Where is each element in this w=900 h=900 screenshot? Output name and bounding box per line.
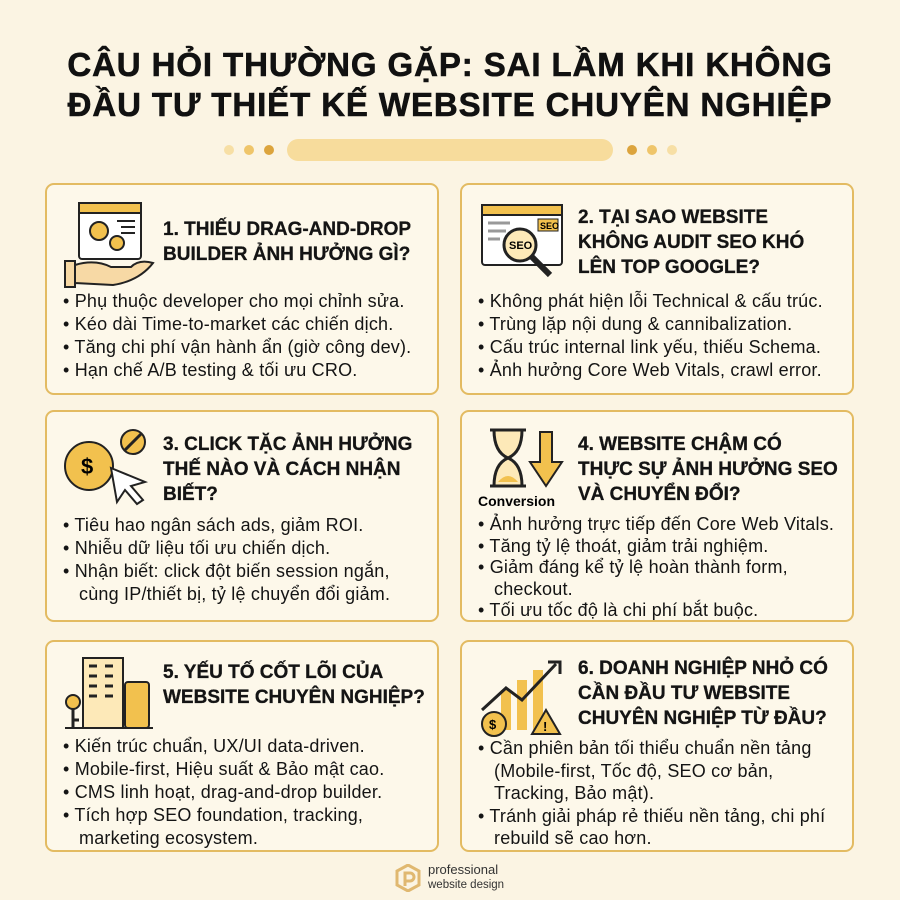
panel 4 bbox=[460, 410, 854, 622]
icon: building key phone bbox=[65, 657, 153, 729]
heading bbox=[578, 432, 838, 505]
bullets bbox=[63, 515, 390, 604]
heading: 3. CLICK TẶC ẢNH HƯỞNG bbox=[163, 434, 412, 455]
bullets: • Giảm đáng kể tỷ lệ hoàn thành form, checkout. bbox=[478, 557, 788, 598]
bullets bbox=[63, 736, 384, 848]
bullets: • Trùng lặp nội dung & cannibalization. bbox=[478, 314, 792, 334]
panel 2 bbox=[460, 183, 854, 395]
heading bbox=[162, 660, 425, 708]
icon: growth chart coins bbox=[481, 660, 562, 737]
heading: THẾ NÀO VÀ CÁCH NHẬN bbox=[163, 459, 400, 480]
bullets: • Kéo dài Time-to-market các chiến dịch. bbox=[63, 314, 393, 334]
heading: LÊN TOP GOOGLE? bbox=[578, 257, 760, 278]
heading: BIẾT? bbox=[163, 484, 218, 505]
bullets bbox=[63, 291, 411, 380]
heading: 4. WEBSITE CHẬM CÓ bbox=[578, 434, 782, 455]
heading: 6. DOANH NGHIỆP NHỎ CÓ bbox=[578, 658, 828, 679]
bullets: • Tránh giải pháp rẻ thiếu nền tảng, chi phí rebuild sẽ cao hơn. bbox=[478, 806, 825, 848]
icon: money bag cursor: $ bbox=[81, 454, 93, 479]
bullets: • Phụ thuộc developer cho mọi chỉnh sửa. bbox=[63, 291, 405, 311]
heading bbox=[163, 217, 411, 265]
bullets: • Ảnh hưởng Core Web Vitals, crawl error. bbox=[478, 360, 822, 380]
title bbox=[67, 46, 833, 123]
heading: CHUYÊN NGHIỆP TỪ ĐẦU? bbox=[578, 708, 827, 729]
heading: 5. YẾU TỐ CỐT LÕI CỦA bbox=[163, 662, 383, 683]
title: CÂU HỎI THƯỜNG GẶP: SAI LẦM KHI KHÔNG bbox=[67, 46, 833, 83]
bullets: • Hạn chế A/B testing & tối ưu CRO. bbox=[63, 360, 357, 380]
decorative divider bbox=[224, 139, 677, 161]
icon: SEO magnifier: SEO bbox=[540, 221, 559, 231]
heading bbox=[578, 656, 828, 729]
bullets: • Cần phiên bản tối thiểu chuẩn nền tảng (Mobile-first, Tốc độ, SEO cơ bản, Tracking, Bảo mật). bbox=[478, 738, 812, 803]
bullets: • Mobile-first, Hiệu suất & Bảo mật cao. bbox=[63, 759, 384, 779]
heading bbox=[163, 432, 412, 505]
icon: money bag cursor bbox=[64, 429, 148, 506]
heading: VÀ CHUYỂN ĐỔI? bbox=[578, 484, 741, 505]
bullets: • Tích hợp SEO foundation, tracking, marketing ecosystem. bbox=[63, 805, 363, 848]
heading: KHÔNG AUDIT SEO KHÓ bbox=[578, 232, 804, 253]
icon: growth chart coins: $ bbox=[489, 717, 497, 732]
panel 1 bbox=[45, 183, 439, 395]
icon: hourglass conversion bbox=[478, 428, 564, 509]
panel 5 bbox=[45, 640, 439, 852]
heading: BUILDER ẢNH HƯỞNG GÌ? bbox=[163, 244, 410, 265]
icon: hourglass conversion: Conversion bbox=[478, 493, 555, 509]
panel 6 bbox=[460, 640, 854, 852]
heading: WEBSITE CHUYÊN NGHIỆP? bbox=[163, 687, 425, 708]
bullets: • Không phát hiện lỗi Technical & cấu trúc. bbox=[478, 291, 823, 311]
bullets bbox=[478, 738, 826, 848]
bullets: • Tăng chi phí vận hành ẩn (giờ công dev). bbox=[63, 337, 411, 357]
icon: growth chart coins: ! bbox=[543, 719, 547, 734]
heading bbox=[578, 207, 804, 278]
bullets bbox=[478, 290, 823, 380]
footer logo bbox=[396, 862, 504, 892]
bullets: • Kiến trúc chuẩn, UX/UI data-driven. bbox=[63, 736, 365, 756]
bullets: • Tiêu hao ngân sách ads, giảm ROI. bbox=[63, 515, 363, 535]
bullets: • CMS linh hoạt, drag-and-drop builder. bbox=[63, 782, 382, 802]
heading: 2. TẠI SAO WEBSITE bbox=[578, 207, 768, 228]
bullets: • Tăng tỷ lệ thoát, giảm trải nghiệm. bbox=[478, 536, 769, 556]
footer logo: website design bbox=[428, 879, 504, 891]
bullets: • Ảnh hưởng trực tiếp đến Core Web Vitals. bbox=[478, 514, 834, 534]
bullets: • Tối ưu tốc độ là chi phí bắt buộc. bbox=[478, 600, 758, 620]
heading: 1. THIẾU DRAG-AND-DROP bbox=[163, 219, 411, 240]
bullets: • Cấu trúc internal link yếu, thiếu Schema. bbox=[478, 337, 821, 357]
panel 3 bbox=[45, 410, 439, 622]
heading: THỰC SỰ ẢNH HƯỞNG SEO bbox=[578, 459, 838, 480]
bullets bbox=[478, 514, 834, 620]
footer logo: professional bbox=[428, 862, 498, 877]
icon: gears hand bbox=[64, 202, 155, 288]
icon: SEO magnifier: SEO bbox=[509, 240, 533, 252]
title: ĐẦU TƯ THIẾT KẾ WEBSITE CHUYÊN NGHIỆP bbox=[68, 86, 832, 123]
bullets: • Nhận biết: click đột biến session ngắn, cùng IP/thiết bị, tỷ lệ chuyển đổi giảm. bbox=[63, 561, 390, 604]
heading: CẦN ĐẦU TƯ WEBSITE bbox=[578, 683, 790, 704]
icon: SEO magnifier bbox=[481, 204, 563, 278]
bullets: • Nhiễu dữ liệu tối ưu chiến dịch. bbox=[63, 538, 330, 558]
